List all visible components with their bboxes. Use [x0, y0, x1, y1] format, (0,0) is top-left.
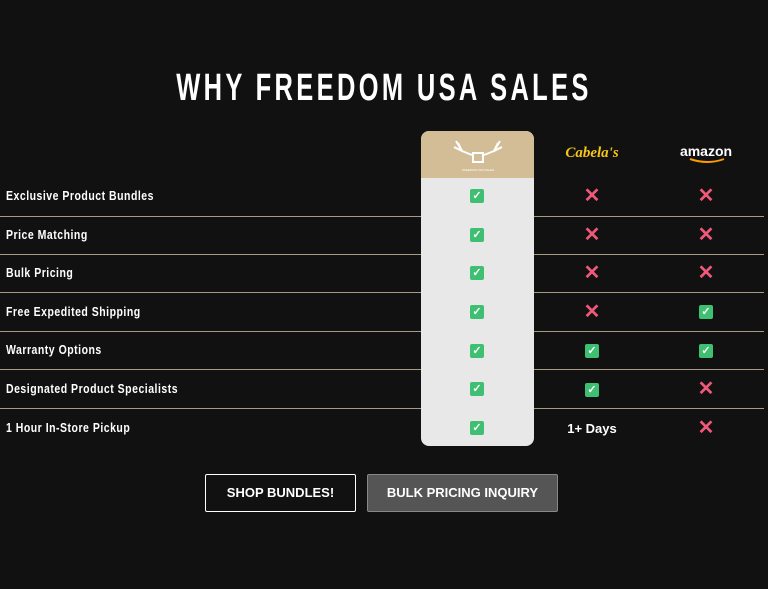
amazon marks: ✕: [698, 224, 714, 246]
logo: Cabela's: Cabela's: [565, 145, 619, 161]
freedom checks: ✓: [472, 306, 482, 318]
cabelas marks: ✕: [584, 224, 600, 246]
freedom checks: [470, 189, 484, 435]
card header with logo: [421, 131, 534, 178]
amazon marks: ✓: [701, 345, 711, 357]
cabelas marks: ✓: [587, 345, 597, 357]
text: Bulk Pricing: [6, 266, 73, 280]
text: Price Matching: [6, 228, 88, 242]
amazon marks: [698, 185, 714, 439]
amazon marks: ✕: [698, 378, 714, 400]
text: Designated Product Specialists: [6, 382, 178, 396]
panel: freedom column card: [421, 131, 534, 446]
icon: antler logo: [454, 140, 502, 172]
button: shop bundles: [205, 474, 356, 512]
button: bulk pricing inquiry: [367, 474, 558, 512]
cabelas marks: ✓: [587, 384, 597, 396]
title: WHY FREEDOM USA SALES: [176, 67, 592, 109]
text: Free Expedited Shipping: [6, 305, 141, 319]
freedom checks: ✓: [472, 422, 482, 434]
amazon marks: ✕: [698, 417, 714, 439]
logo: amazon: amazon: [680, 143, 732, 159]
cabelas pickup text: 1+ Days: [567, 421, 617, 436]
feature labels: Exclusive Product Bundles: [6, 189, 154, 203]
freedom checks: ✓: [472, 345, 482, 357]
amazon marks: ✓: [701, 306, 711, 318]
button: shop bundles: SHOP BUNDLES!: [227, 485, 334, 500]
amazon marks: ✕: [698, 262, 714, 284]
button: bulk pricing inquiry: BULK PRICING INQUIRY: [387, 485, 538, 500]
cabelas marks: ✕: [584, 262, 600, 284]
freedom checks: ✓: [472, 267, 482, 279]
icon: antler logo: FREEDOM USA SALES: [462, 168, 494, 172]
text: Warranty Options: [6, 343, 102, 357]
freedom checks: ✓: [472, 383, 482, 395]
cabelas marks: ✕: [584, 301, 600, 323]
cabelas marks: [584, 185, 600, 397]
text: 1 Hour In-Store Pickup: [6, 421, 130, 435]
freedom checks: ✓: [472, 229, 482, 241]
cabelas marks: ✕: [584, 185, 600, 207]
freedom checks: ✓: [472, 190, 482, 202]
amazon marks: ✕: [698, 185, 714, 207]
